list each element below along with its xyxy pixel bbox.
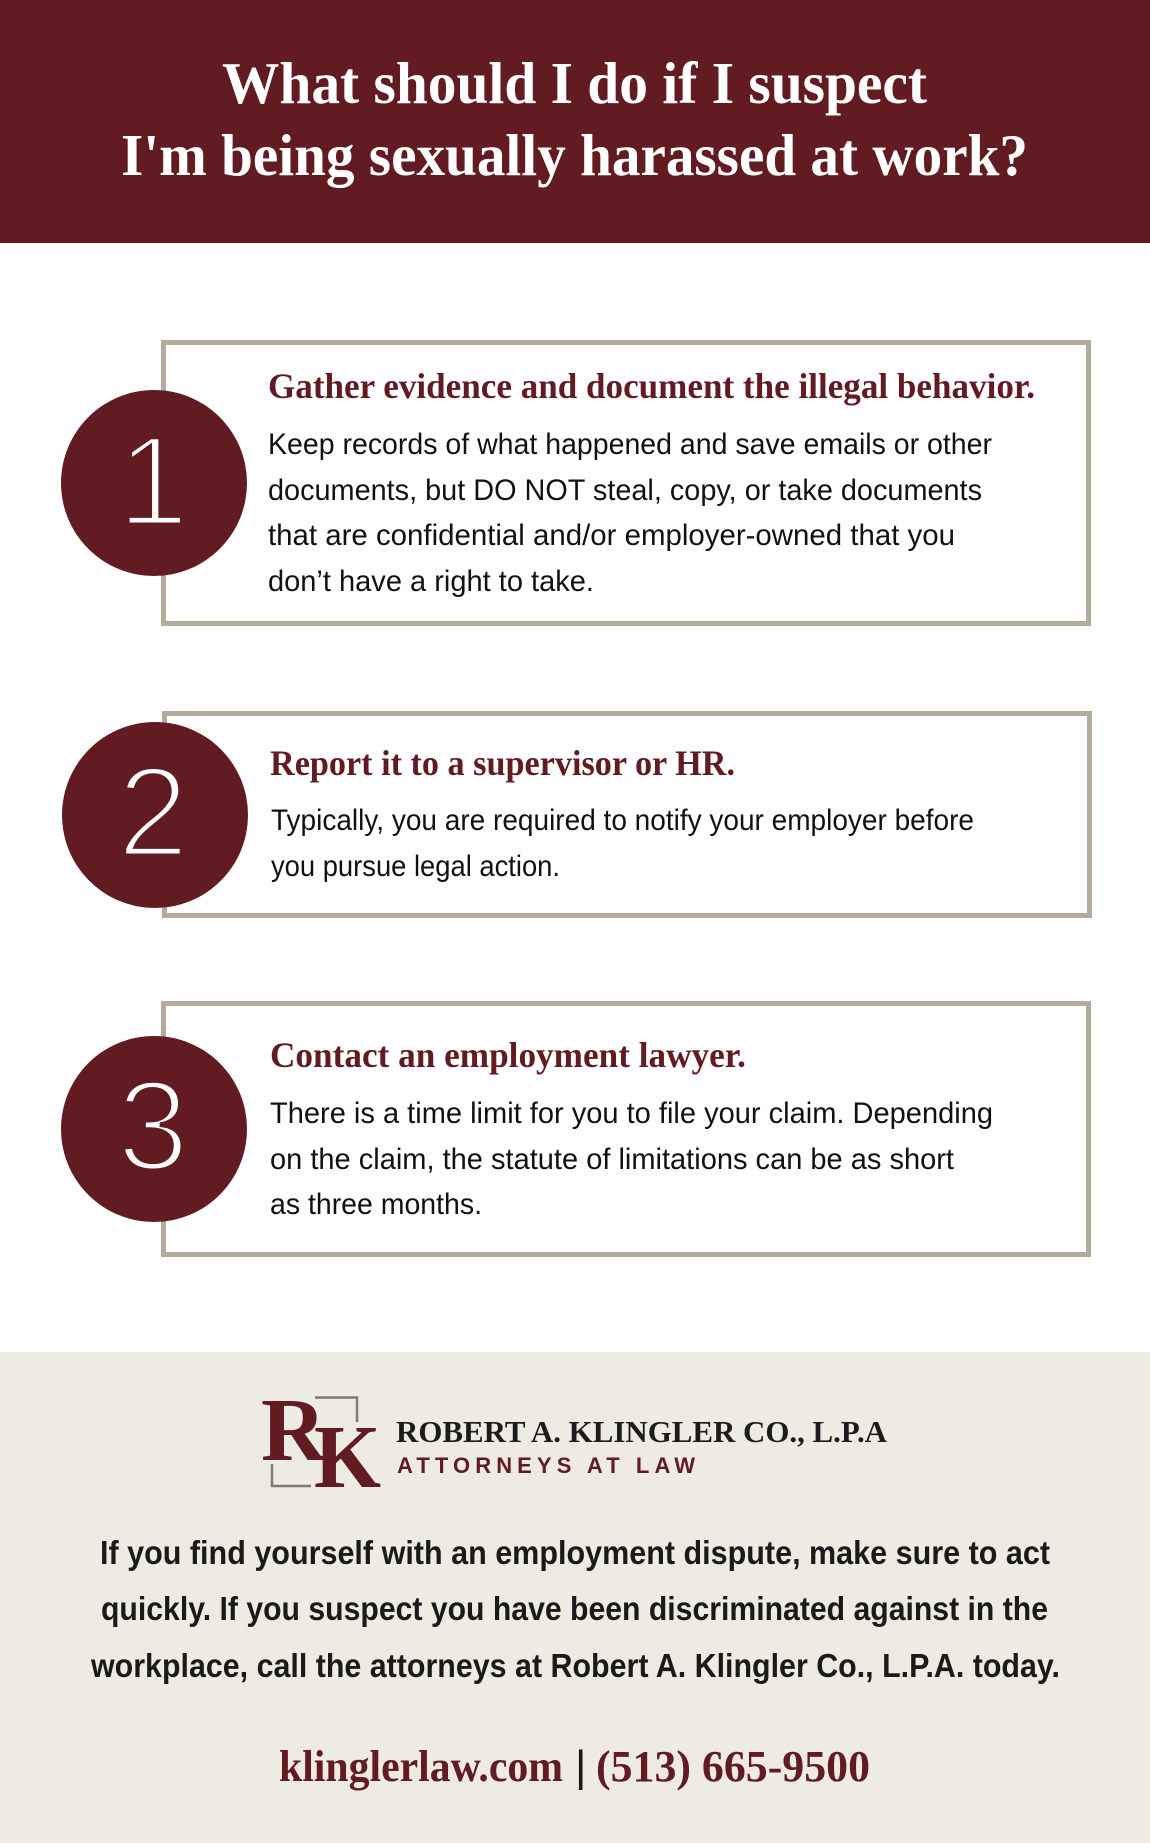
body text step 1: don’t have a right to take.	[268, 565, 594, 598]
title: What should I do if I suspect	[222, 50, 927, 116]
panel: step 1 gather evidence	[61, 342, 1088, 624]
body text step 2	[271, 804, 974, 883]
contact line: (513) 665-9500	[596, 1742, 870, 1791]
number badge 1	[61, 390, 247, 576]
call to action text: If you find yourself with an employment dispute, make sure to act	[100, 1534, 1050, 1571]
call to action text	[90, 1534, 1060, 1684]
call to action text: workplace, call the attorneys at Robert A. Klingler Co., L.P.A. today.	[90, 1647, 1060, 1684]
body text step 2: you pursue legal action.	[271, 850, 560, 883]
firm tagline: ATTORNEYS AT LAW	[397, 1453, 695, 1478]
icon: RK monogram: K	[314, 1408, 381, 1507]
icon: RK monogram	[261, 1381, 381, 1507]
call to action text: quickly. If you suspect you have been discriminated against in the	[101, 1590, 1048, 1627]
box outline	[164, 714, 1090, 916]
box outline	[164, 1004, 1088, 1254]
body text step 3: as three months.	[270, 1188, 482, 1221]
body text step 3: on the claim, the statute of limitations can be as short	[270, 1143, 955, 1176]
body text step 3	[270, 1097, 993, 1221]
heading step 2: Report it to a supervisor or HR.	[270, 743, 735, 783]
number badge 2: 2	[117, 741, 189, 884]
number badge 1: 1	[117, 410, 189, 553]
number badge 3	[61, 1036, 247, 1222]
panel: step 2 report it	[62, 714, 1090, 916]
body text step 1: Keep records of what happened and save emails or other	[268, 428, 992, 461]
firm name: ROBERT A. KLINGLER CO., L.P.A	[396, 1414, 888, 1449]
contact line: klinglerlaw.com	[279, 1742, 563, 1791]
heading step 3: Contact an employment lawyer.	[270, 1035, 746, 1075]
number badge 2	[62, 722, 248, 908]
firm logo	[261, 1381, 888, 1507]
box outline	[164, 342, 1088, 624]
icon: RK monogram: R	[261, 1381, 327, 1480]
contact line	[279, 1742, 870, 1791]
heading step 1: Gather evidence and document the illegal behavior.	[268, 366, 1035, 406]
header banner	[0, 0, 1150, 243]
title: I'm being sexually harassed at work?	[121, 122, 1028, 188]
body text step 3: There is a time limit for you to file your claim. Depending	[270, 1097, 993, 1130]
number badge 3: 3	[117, 1055, 189, 1198]
body text step 1	[268, 428, 992, 598]
footer panel	[0, 1352, 1150, 1843]
body text step 2: Typically, you are required to notify your employer before	[271, 804, 974, 837]
contact line: |	[575, 1742, 586, 1791]
title	[121, 50, 1028, 188]
panel: step 3 contact a lawyer	[61, 1004, 1088, 1254]
body text step 1: that are confidential and/or employer-owned that you	[268, 519, 955, 552]
body text step 1: documents, but DO NOT steal, copy, or take documents	[268, 474, 982, 507]
